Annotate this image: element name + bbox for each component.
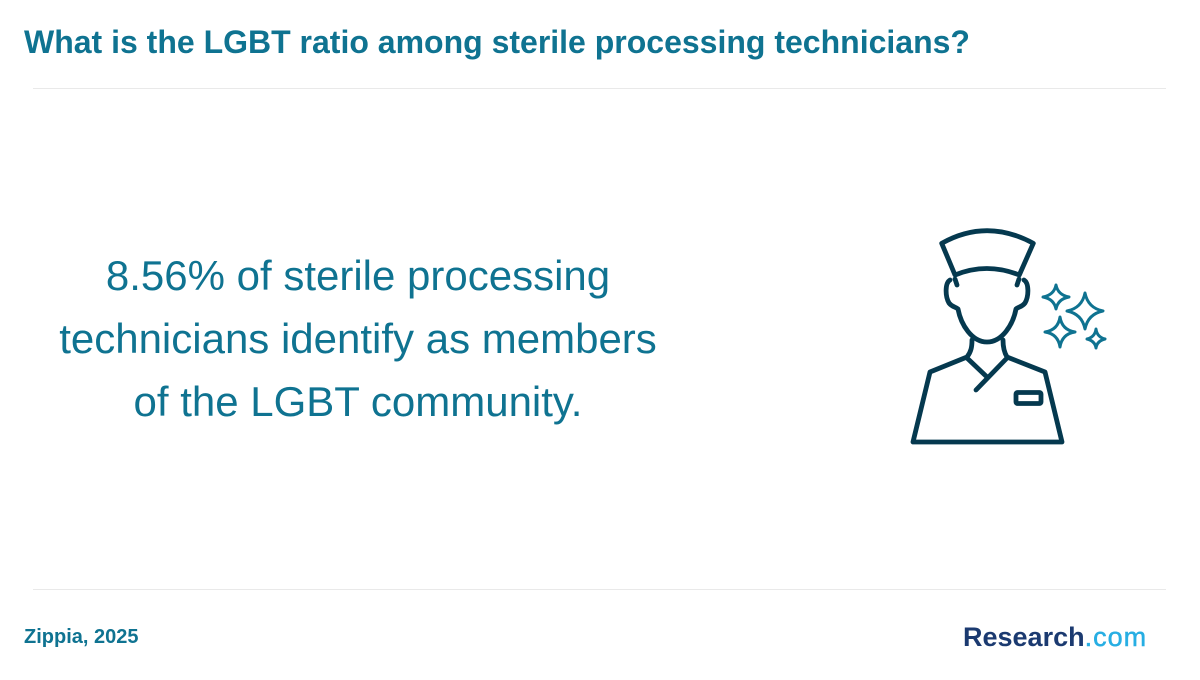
source label: Zippia, 2025: [24, 626, 138, 648]
main statistic text: 8.56% of sterile processing: [106, 252, 610, 299]
icon: sparkles: [1043, 285, 1105, 348]
icon: technician figure: [913, 231, 1062, 442]
main statistic text: technicians identify as members: [59, 315, 657, 362]
logo: Research.com: Research.com: [963, 622, 1147, 652]
main statistic text: [59, 252, 657, 425]
main statistic text: of the LGBT community.: [134, 378, 582, 425]
icon: sterile processing technician with sparkles: [910, 228, 1106, 444]
title: What is the LGBT ratio among sterile processing technicians?: [24, 24, 970, 60]
